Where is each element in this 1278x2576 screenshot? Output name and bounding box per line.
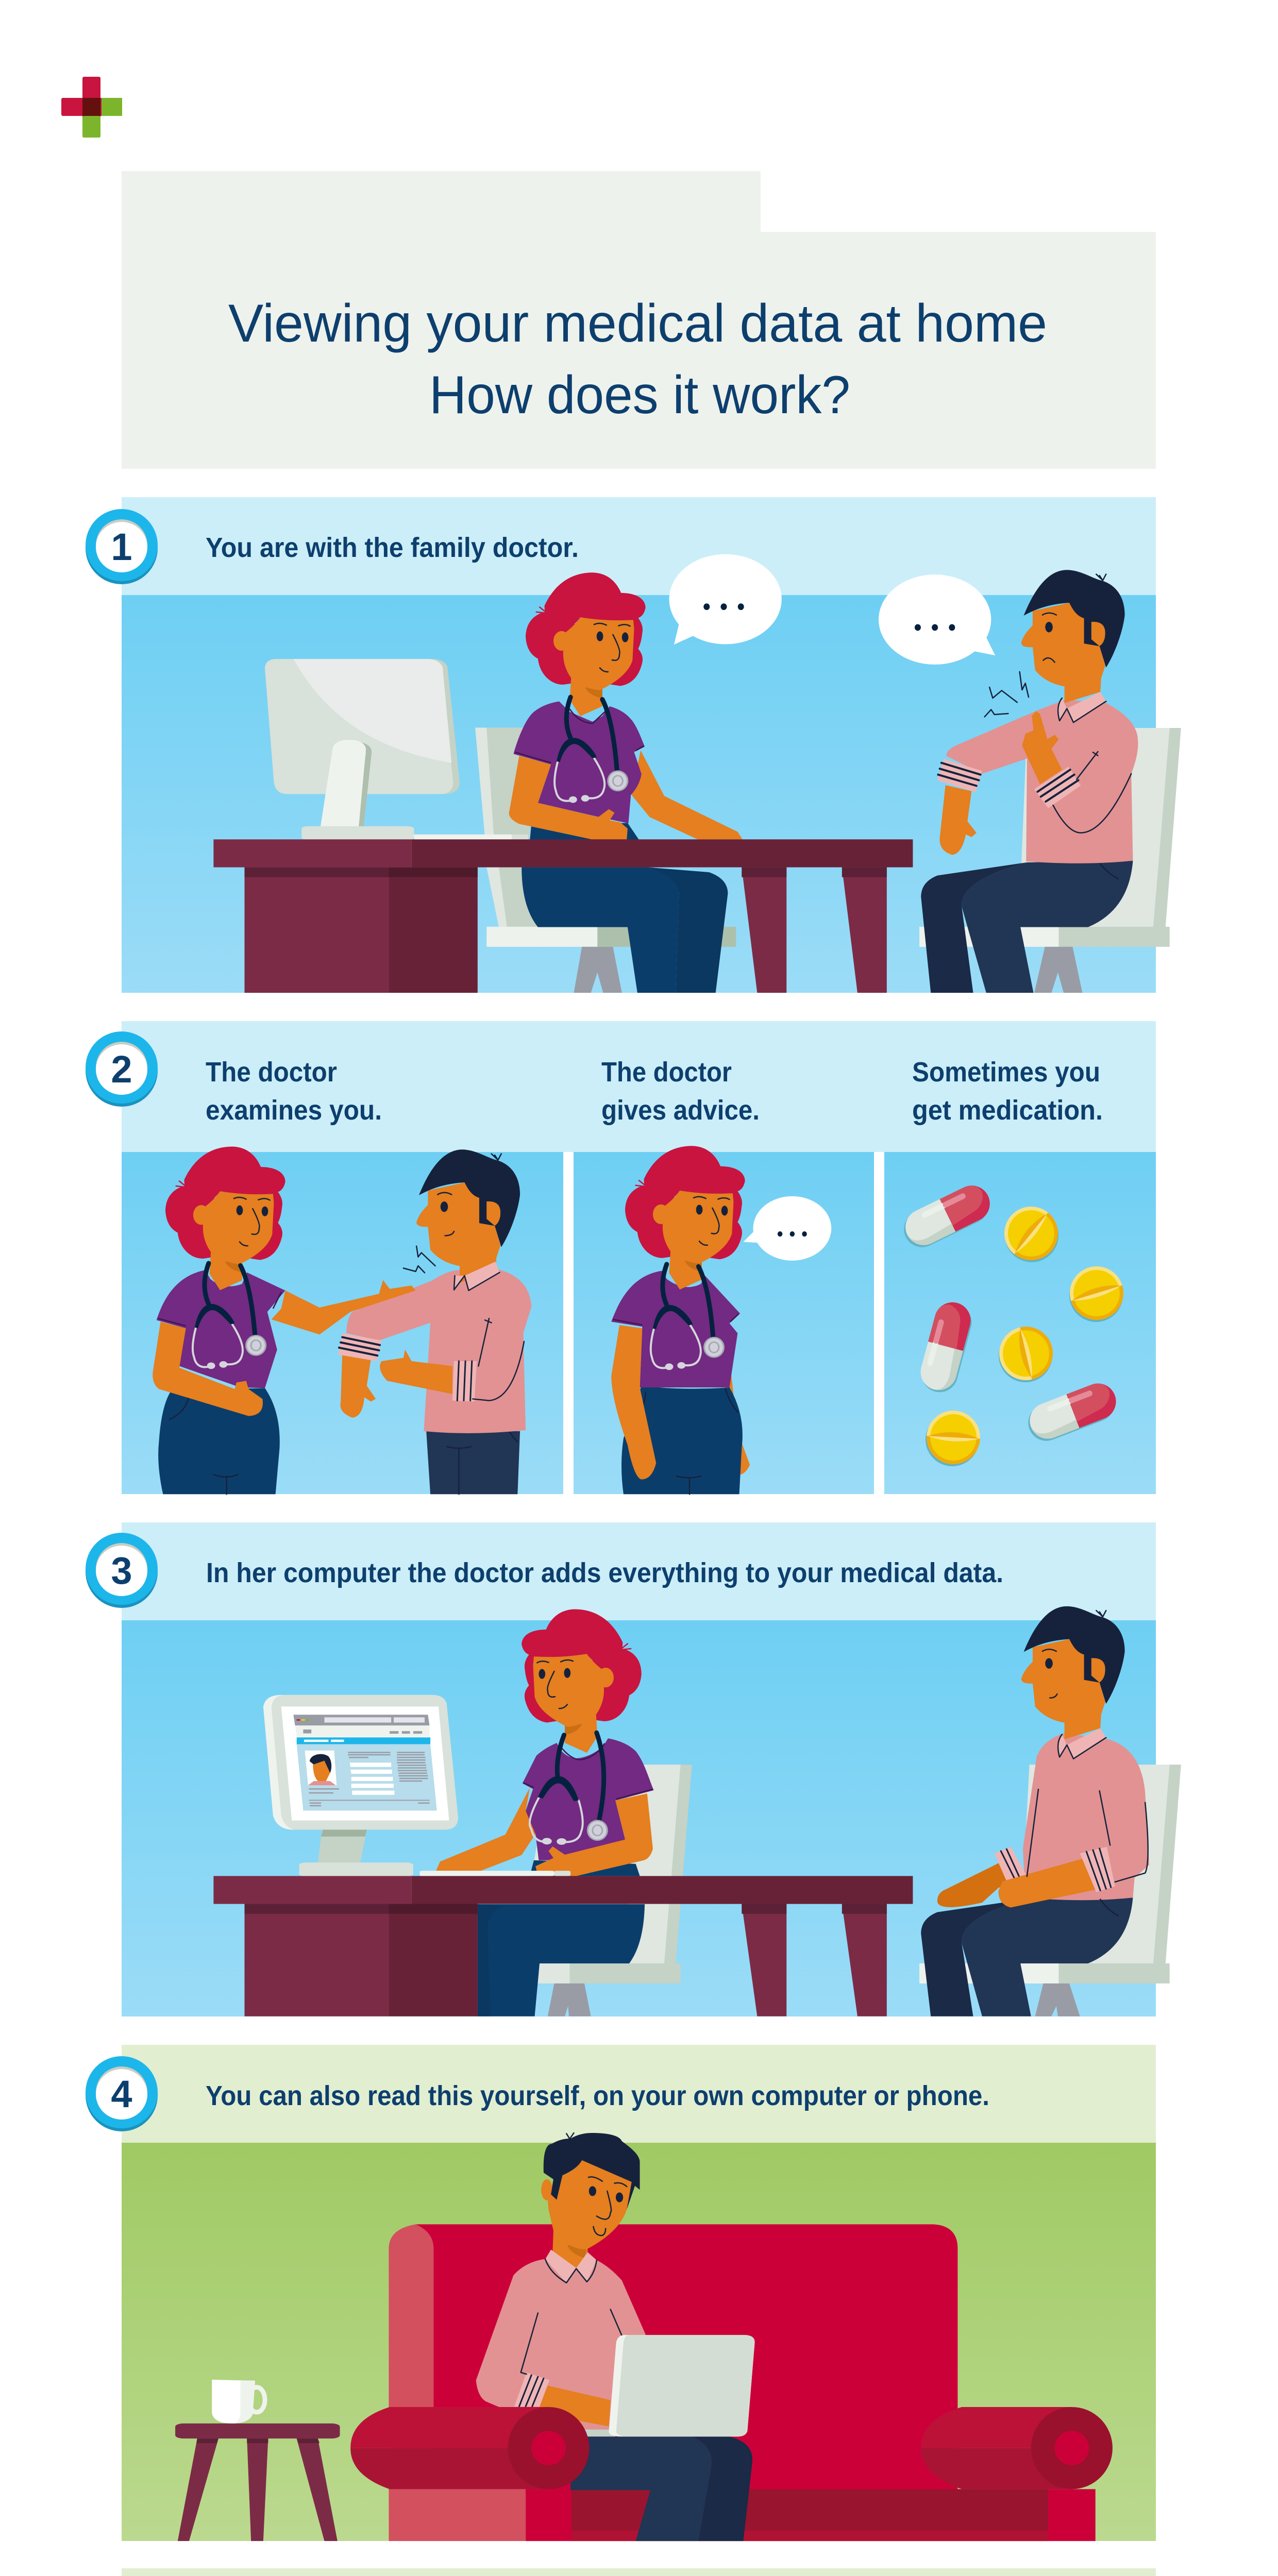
- patient chair: [919, 728, 1181, 993]
- panel 5: log in: [122, 2568, 1156, 2576]
- patient: [921, 570, 1138, 993]
- title panel: [122, 171, 1156, 469]
- number badge 2: [86, 1031, 158, 1107]
- scene 3 illustration: [213, 1606, 1181, 2016]
- step 2 column headings: get medication.: [912, 1095, 1103, 1126]
- capsule top: [898, 1179, 996, 1253]
- title panel: How does it work?: [429, 365, 850, 425]
- scene: doctor gives advice: [611, 1146, 831, 1494]
- speech bubble: patient: [879, 574, 995, 665]
- step 2 column headings: The doctor: [206, 1057, 337, 1088]
- tablet 3: [994, 1321, 1058, 1385]
- panel 2: examination, advice, medication: [122, 1021, 1156, 1494]
- side table with mug: [175, 2380, 340, 2541]
- step 2 column headings: The doctor: [601, 1057, 732, 1088]
- title panel: Viewing your medical data at home: [228, 294, 1047, 353]
- patient seated: [921, 1606, 1149, 2016]
- tablet 2: [1063, 1260, 1130, 1327]
- number badge 3: [86, 1533, 158, 1608]
- capsule bottom: [1023, 1378, 1121, 1446]
- step 2 column headings: gives advice.: [601, 1095, 760, 1126]
- patient chair: [919, 1765, 1181, 2016]
- desk: [213, 1876, 913, 2016]
- desk: [213, 839, 913, 993]
- panel 4: read at home: [122, 2045, 1156, 2541]
- step 2 column headings: Sometimes you: [912, 1057, 1100, 1088]
- monitor with patient file: [263, 1695, 570, 1876]
- step 2 column headings: [206, 1057, 1103, 1126]
- speech bubble: [743, 1196, 831, 1261]
- number badge 4: 4: [111, 2073, 132, 2115]
- sofa: [389, 2224, 1096, 2541]
- capsule middle: [917, 1298, 976, 1396]
- scene: doctor examines patient: [153, 1147, 531, 1494]
- scene: medication pills: [898, 1179, 1130, 1466]
- step 1 text: You are with the family doctor.: [206, 532, 579, 563]
- number badge 2: 2: [111, 1048, 132, 1091]
- number badge 1: [86, 509, 158, 584]
- number badge 4: [86, 2056, 158, 2131]
- scene 4 illustration: [175, 2133, 1113, 2541]
- speech bubble: doctor: [669, 554, 782, 645]
- man with laptop: [476, 2133, 755, 2541]
- stethoscope: [530, 1733, 608, 1845]
- monitor: [265, 659, 528, 840]
- step 3 text: In her computer the doctor adds everything to your medical data.: [206, 1557, 1003, 1588]
- scene 1 illustration: [213, 554, 1181, 993]
- tablet 1: [994, 1196, 1069, 1271]
- step 2 column headings: examines you.: [206, 1095, 382, 1126]
- number badge 1: 1: [111, 526, 132, 568]
- logo: medical cross: [61, 77, 122, 138]
- sofa armrests: [350, 2407, 1113, 2489]
- number badge 3: 3: [111, 1549, 132, 1592]
- step 4 text: You can also read this yourself, on your own computer or phone.: [206, 2080, 989, 2111]
- panel 3: doctor adds to medical data: [122, 1522, 1181, 2016]
- tablet 4: [925, 1409, 982, 1466]
